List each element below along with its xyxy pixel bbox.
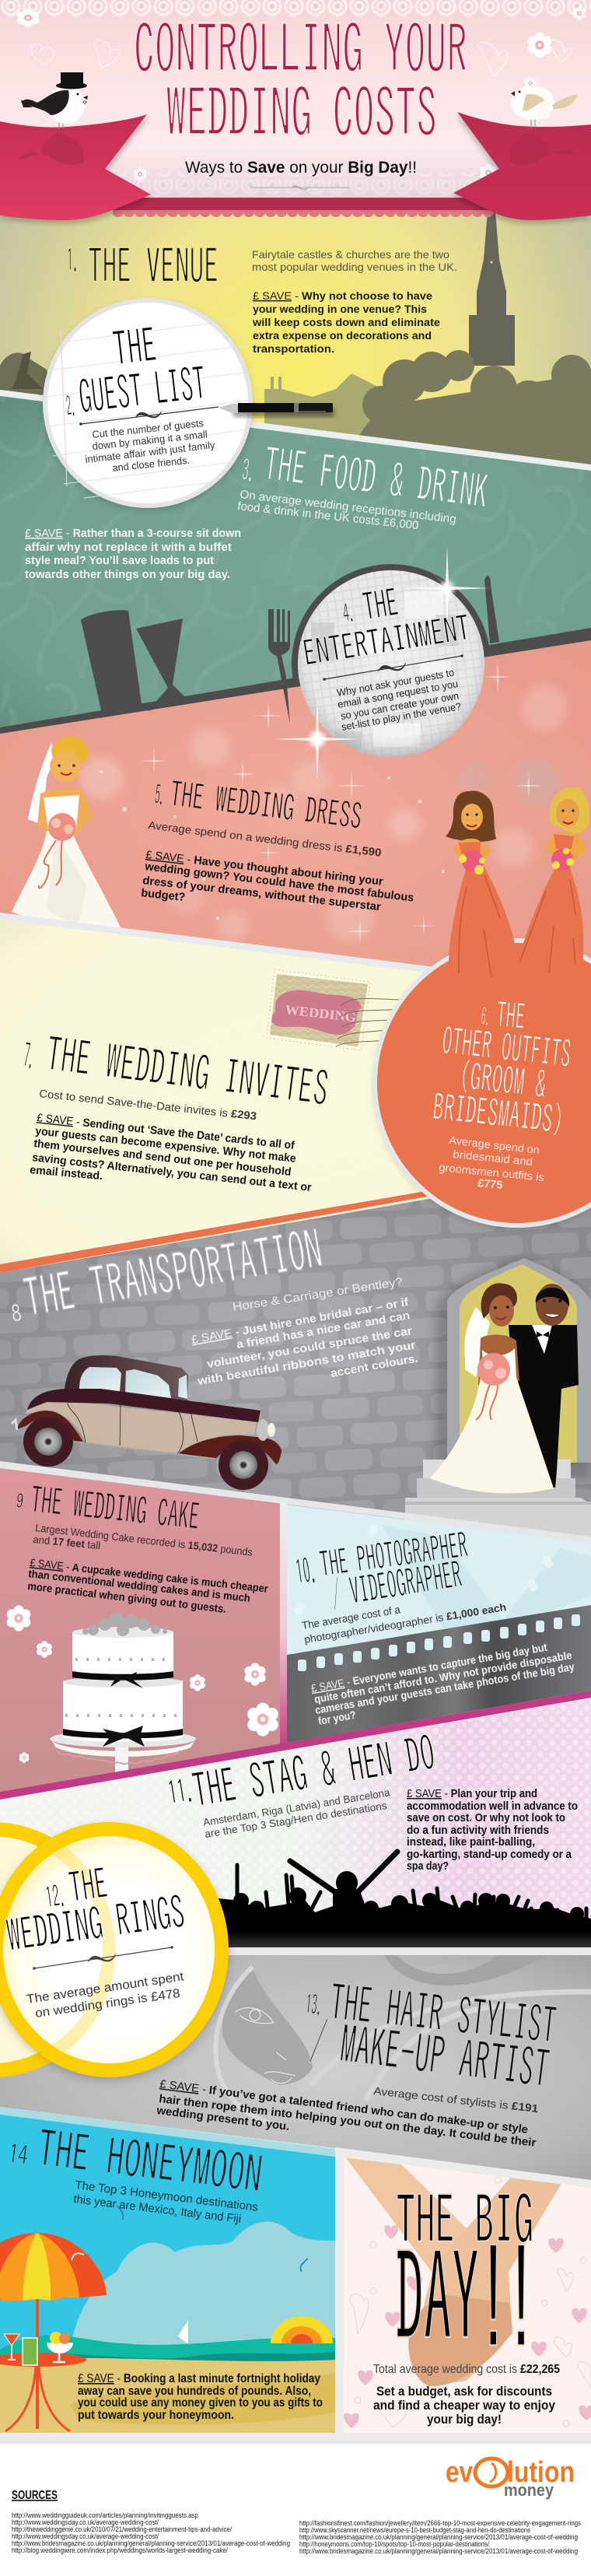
sources list left <box>12 2511 290 2554</box>
venue save tip <box>252 289 440 355</box>
rings cost text <box>26 1970 185 2020</box>
photographer save tip: quite often can’t afford to. Why not provide disposable <box>313 1649 573 1705</box>
stylist save tip: hair then rope them into helping you out on the day. It could be their <box>159 2093 537 2150</box>
heading: the photographer: / VIDEOGRAPHER <box>328 1555 464 1613</box>
divider <box>33 1946 173 1970</box>
sources list left: http://blog.weddingwire.com/index.php/weddings/worlds-largest-wedding-cake/ <box>12 2546 228 2554</box>
illustration: wedding cake <box>50 1613 196 1774</box>
transport save tip: £ SAVE - Just hire one bridal car – or if <box>191 1296 410 1347</box>
heading: the transportation: THE TRANSPORTATION <box>20 1221 326 1326</box>
honeymoon save tip: £ SAVE - Booking a last minute fortnight holiday <box>78 2372 320 2385</box>
panel: other outfits <box>375 787 591 1226</box>
illustration: bridesmaids <box>446 787 589 982</box>
heading: wedding rings <box>4 1862 187 1958</box>
sources list right: http://honeymoons.com/top-10/spots/top-10-most-popular-destinations/ <box>299 2540 489 2548</box>
stag save tip: accommodation well in advance to <box>407 1800 578 1813</box>
heading: the other outfits <box>431 997 573 1139</box>
heading: the photographer <box>294 1526 470 1613</box>
sources list left: http://www.bridesmagazine.co.uk/planning/general/planning-service/2013/01/average-cost-of-wedding <box>12 2539 290 2547</box>
rings cost text: on wedding rings is £478 <box>34 1987 181 2020</box>
sources heading: SOURCES <box>12 2489 58 2502</box>
panel: wedding invites <box>0 913 591 1276</box>
heading: the other outfits: THE <box>495 997 526 1035</box>
stylist save tip: wedding present to you. <box>155 2105 290 2133</box>
cake record text: Largest Wedding Cake recorded is 15,032 pounds <box>35 1522 254 1558</box>
guest list text: and close friends. <box>112 454 191 474</box>
cake save tip: £ SAVE - A cupcake wedding cake is much cheaper <box>30 1556 269 1595</box>
outfits cost text <box>439 1134 545 1191</box>
panel: header <box>0 0 591 210</box>
heading: the honeymoon: 14 <box>7 2140 29 2169</box>
transport text: Horse & Carriage or Bentley? <box>232 1275 404 1314</box>
heading: the entertainment <box>301 583 472 671</box>
heading: the guest list: 2. <box>65 392 77 420</box>
illustration: party crowd <box>219 1852 591 1949</box>
stag save tip: go-karting, stand-up comedy or a <box>407 1849 572 1861</box>
dress save tip <box>141 849 414 913</box>
closing advice <box>373 2384 555 2427</box>
logo: evolution money: lution <box>507 2456 575 2489</box>
cake save tip: more practical when giving out to guests. <box>27 1579 227 1615</box>
guest list text: intimate affair with just family <box>85 439 216 465</box>
heading: the transportation <box>10 1221 326 1326</box>
panel: the wedding cake <box>0 1468 287 1793</box>
illustration: bride <box>12 736 121 928</box>
honeymoon save tip: away can save you hundreds of pounds. Also, <box>78 2385 311 2398</box>
photographer save tip: for you? <box>317 1709 357 1727</box>
guest list text: down by making it a small <box>92 428 208 452</box>
heading: hair stylist: 13. <box>304 1991 324 2019</box>
invites cost text: Cost to send Save-the-Date invites is £293 <box>39 1087 257 1122</box>
food save tip: £ SAVE - Rather than a 3-course sit down <box>25 527 241 540</box>
entertainment text: Why not ask your guests to <box>336 667 455 699</box>
entertainment text: email a song request to you <box>337 678 459 710</box>
illustration: beach scene <box>0 2206 335 2433</box>
heading: the venue: THE VENUE <box>88 242 219 290</box>
heading: the guest list: THE <box>110 321 159 373</box>
transport save tip <box>191 1296 419 1388</box>
entertainment text: set-list to play in the venue? <box>341 700 462 733</box>
dress save tip: dress of your dreams, without the superstar <box>142 874 382 913</box>
stag save tip: do a fun activity with friends <box>407 1824 549 1837</box>
stag text: Amsterdam, Riga (Latvia) and Barcelona <box>202 1786 391 1828</box>
outfits cost text: Average spend on <box>449 1134 540 1156</box>
icons: glasses and cutlery <box>81 564 499 724</box>
venue facts: Fairytale castles & churches are the two <box>252 248 449 261</box>
panel: the big day <box>335 2147 591 2441</box>
transport save tip: with beautiful ribbons to match your <box>196 1339 417 1388</box>
cake save tip <box>27 1556 269 1615</box>
honeymoon text: this year are Mexico, Italy and Fiji <box>73 2192 242 2226</box>
heading: the guest list: GUEST LIST <box>76 360 208 421</box>
venue facts <box>252 248 457 273</box>
heading: the wedding dress: 5. <box>153 781 166 809</box>
postage stamp: WEDDING <box>285 1002 357 1025</box>
stag save tip: £ SAVE - Plan your trip and <box>407 1788 537 1800</box>
disco ball <box>275 545 490 782</box>
stylist save tip: £ SAVE - If you’ve got a talented friend who can do make-up or style <box>159 2078 529 2136</box>
logo: evolution money: ev <box>446 2456 473 2489</box>
heading: the entertainment: ENTERTAINMENT <box>301 610 472 671</box>
heading: stag and hen do <box>166 1728 438 1815</box>
panel: wedding dress <box>0 640 591 988</box>
flowers <box>7 1605 278 1763</box>
heading: the entertainment: 4. <box>341 599 356 626</box>
invites save tip: them yourselves and send out one per household <box>33 1137 292 1179</box>
outfits cost text: £775 <box>477 1176 503 1191</box>
guest list text <box>85 417 216 474</box>
heading: the wedding cake: THE WEDDING CAKE <box>29 1481 201 1535</box>
venue facts: most popular wedding venues in the UK. <box>252 261 457 273</box>
honeymoon text: The Top 3 Honeymoon destinations <box>75 2178 259 2214</box>
transport save tip: accent colours. <box>330 1352 419 1380</box>
illustration: holding hands <box>344 2155 565 2386</box>
heading: wedding rings: 12. <box>44 1880 68 1912</box>
dress cost text: Average spend on a wedding dress is £1,590 <box>148 818 383 859</box>
background hearts <box>344 2177 591 2428</box>
illustration: face and hair <box>215 1955 591 2124</box>
heading: the photographer: 10. <box>294 1553 320 1589</box>
heading: the food and drink: 3. <box>240 455 257 485</box>
panel: guest list <box>45 300 334 509</box>
illustration: vintage car <box>12 1355 282 1490</box>
food save tip: style meal? You’ll save loads to put <box>25 555 214 567</box>
heading: the venue: 1. <box>67 244 79 275</box>
outfits cost text: groomsmen outfits is <box>439 1161 545 1183</box>
heading: the wedding invites: 7. <box>22 1038 37 1074</box>
panel: stag and hen do <box>0 1691 591 1953</box>
guest list text: Cut the number of guests <box>92 417 205 440</box>
postage stamp <box>267 969 406 1050</box>
invites save tip <box>30 1112 313 1194</box>
rings cost text: The average amount spent <box>26 1970 185 2006</box>
logo: evolution money: money <box>504 2480 554 2500</box>
panel: the venue <box>0 204 591 482</box>
heading: the wedding dress: THE WEDDING DRESS <box>168 776 364 835</box>
venue save tip: extra expense on decorations and <box>253 329 432 342</box>
dress save tip: budget? <box>141 887 186 904</box>
closing advice: Set a budget, ask for discounts <box>376 2384 552 2399</box>
sources list right <box>299 2519 581 2555</box>
left ribbon <box>0 114 151 220</box>
footer <box>0 2433 591 2555</box>
invites save tip: email instead. <box>30 1164 103 1183</box>
sources list right: http://www.skyscanner.net/news/europe-s-10-best-budget-stag-and-hen-do-destinations <box>299 2526 530 2534</box>
heading: the other outfits: 6. <box>481 1004 491 1029</box>
heading: the wedding dress <box>153 776 364 835</box>
heading: wedding rings: THE <box>66 1862 110 1909</box>
venue save tip: your wedding in one venue? This <box>253 303 427 315</box>
photographer save tip: £ SAVE - Everyone wants to capture the big day but <box>310 1641 548 1695</box>
invites save tip: saving costs? Alternatively, you can send out a text or <box>32 1151 313 1194</box>
panel: the entertainment <box>0 545 591 782</box>
food cost text: food & drink in the UK costs £6,000 <box>237 499 419 532</box>
divider <box>323 654 463 681</box>
food save tip: affair why not replace it with a buffet <box>25 541 232 554</box>
subtitle: Ways to Save on your Big Day!! <box>185 159 417 177</box>
food save tip: towards other things on your big day. <box>25 569 230 581</box>
sources list left: http://www.weddingsday.co.uk/average-wedding-cost/ <box>12 2532 159 2540</box>
panel: photographer <box>287 1505 591 1743</box>
divider <box>250 185 351 190</box>
honeymoon save tip: you could use any money given to you as gifts to <box>78 2396 323 2410</box>
heading: the wedding invites: THE WEDDING INVITES <box>44 1029 331 1113</box>
film strip <box>287 1605 591 1743</box>
logo: evolution money <box>446 2456 575 2500</box>
heading: wedding rings: WEDDING RINGS <box>4 1888 187 1958</box>
heading: the entertainment: THE <box>360 583 401 627</box>
heading: the big day <box>396 2186 535 2359</box>
stylist cost text: Average cost of stylists is £191 <box>373 2084 539 2115</box>
photographer cost text: photographer/videographer is £1,000 each <box>303 1601 507 1645</box>
venue save tip: £ SAVE - Why not choose to have <box>253 289 432 302</box>
food save tip <box>25 527 241 581</box>
honeymoon save tip <box>78 2372 323 2422</box>
heading: stag and hen do: THE STAG & HEN DO <box>189 1728 438 1815</box>
closing advice: and find a cheaper way to enjoy <box>373 2398 555 2413</box>
right ribbon <box>453 112 591 220</box>
heading: the transportation: 8 <box>10 1301 23 1326</box>
venue save tip: transportation. <box>253 342 334 355</box>
panel: header ribbons and birds <box>0 72 591 224</box>
heading: the guest list <box>65 321 208 421</box>
food cost text: On average wedding receptions including <box>240 488 457 526</box>
heading: the honeymoon <box>7 2122 265 2200</box>
icon: groom bird <box>21 72 88 128</box>
heading: the venue <box>67 242 219 290</box>
entertainment text: so you can create your own <box>340 689 460 722</box>
photographer save tip <box>310 1641 575 1727</box>
stag save tip: save on cost. Or why not look to <box>407 1812 565 1824</box>
transport save tip: volunteer, you could spruce the car <box>206 1325 414 1371</box>
icon: bride bird <box>511 77 577 128</box>
dress save tip: wedding gown? You could have the most fabulous <box>144 860 414 905</box>
photographer cost text: The average cost of a <box>301 1603 401 1631</box>
panel: wedding rings <box>0 1826 229 2080</box>
sources list left: http://theweddinggenie.co.uk/2010/07/21/wedding-entertainment-tips-and-advice/ <box>12 2525 232 2533</box>
panel: hair stylist <box>0 1947 591 2189</box>
invites save tip: £ SAVE - Sending out ‘Save the Date’ cards to all of <box>37 1112 296 1152</box>
cake record text: and 17 feet tall <box>33 1533 101 1551</box>
heading: the wedding cake <box>16 1481 201 1535</box>
closing advice: your big day! <box>427 2412 502 2427</box>
heading: stag and hen do: 11. <box>166 1773 198 1810</box>
stag text: are the Top 3 Stag/Hen do destinations <box>204 1800 388 1840</box>
panel: the honeymoon <box>0 2107 342 2433</box>
stag save tip: instead, like paint-balling, <box>407 1836 535 1849</box>
illustration: couple in arch <box>405 1257 591 1551</box>
sources list left: http://www.weddingsday.co.uk/average-wedding-cost/ <box>12 2518 159 2526</box>
venue silhouettes <box>0 204 591 482</box>
heading: the wedding invites <box>22 1029 331 1113</box>
heading: the wedding cake: 9 <box>16 1491 24 1512</box>
dress save tip: £ SAVE - Have you thought about hiring your <box>145 849 384 888</box>
divider <box>79 407 219 426</box>
transport save tip: a friend has a nice car and can <box>236 1309 411 1351</box>
venue save tip: will keep costs down and eliminate <box>252 316 440 328</box>
heading: the honeymoon: THE HONEYMOON <box>35 2122 265 2200</box>
total cost text: Total average wedding cost is £22,265 <box>373 2363 560 2376</box>
panel: the transportation <box>0 1171 591 1551</box>
heading: hair stylist <box>304 1976 558 2096</box>
title <box>134 15 467 146</box>
icon: pen <box>219 403 334 417</box>
stag save tip <box>407 1788 578 1873</box>
heading: the food and drink <box>240 440 491 516</box>
invites save tip: your guests can become expensive. Why not make <box>35 1125 296 1165</box>
entertainment text <box>336 667 462 733</box>
honeymoon save tip: put towards your honeymoon. <box>78 2409 234 2422</box>
stag save tip: spa day? <box>407 1860 449 1873</box>
sources list left: http://www.weddingguideuk.com/articles/planning/invitingguests.asp <box>12 2511 198 2519</box>
cake save tip: than conventional wedding cakes and is much <box>28 1567 251 1604</box>
outfits cost text: bridesmaid and <box>453 1148 533 1168</box>
panel: food and drink <box>0 390 591 739</box>
